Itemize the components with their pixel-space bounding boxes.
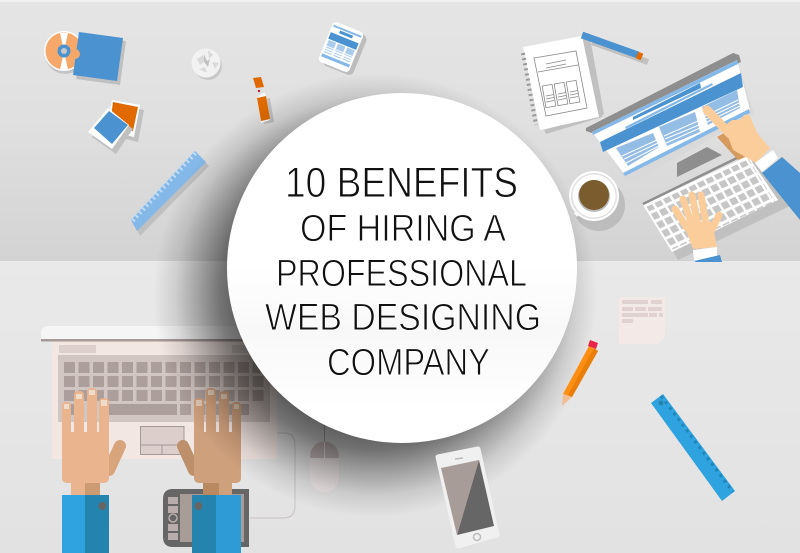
background: lower desk band (0, 261, 800, 553)
illustration: laptop (41, 326, 277, 459)
icon: mouse and cable (250, 420, 339, 518)
icon: graphics tablet (163, 489, 249, 547)
icon: orange pencil (562, 340, 598, 406)
title text: WEB DESIGNING (265, 297, 541, 339)
illustration: keyboard (643, 156, 790, 260)
icon: CD and sleeve (44, 31, 126, 85)
icon: blue pen (582, 35, 648, 62)
icon: coffee cup (569, 171, 625, 231)
title text: 10 BENEFITS (285, 159, 518, 207)
icon: sticky note (619, 297, 665, 344)
icon: instant photos (88, 100, 144, 154)
title text: OF HIRING A (300, 208, 507, 250)
background: upper desk band (0, 0, 800, 261)
icon: smartphone (438, 449, 497, 546)
central title circle (227, 93, 577, 443)
illustration: left hand and sleeve (62, 388, 120, 553)
icon: tablet (318, 21, 368, 76)
circle drop shadow (153, 73, 597, 517)
title text (265, 159, 541, 384)
illustration: monitor with web layout (586, 53, 754, 183)
icon: highlighter (253, 77, 274, 124)
icon: light blue ruler (131, 151, 209, 236)
title text: PROFESSIONAL (276, 253, 527, 295)
title text: COMPANY (327, 342, 490, 384)
illustration: right hand and sleeve (183, 388, 241, 553)
icon: notebook with wireframe (523, 36, 604, 134)
illustration: pointing hand on monitor (707, 110, 800, 220)
illustration: typing hand on keyboard (675, 195, 722, 262)
icon: blue ruler (651, 394, 735, 501)
icon: crumpled paper (192, 48, 222, 80)
